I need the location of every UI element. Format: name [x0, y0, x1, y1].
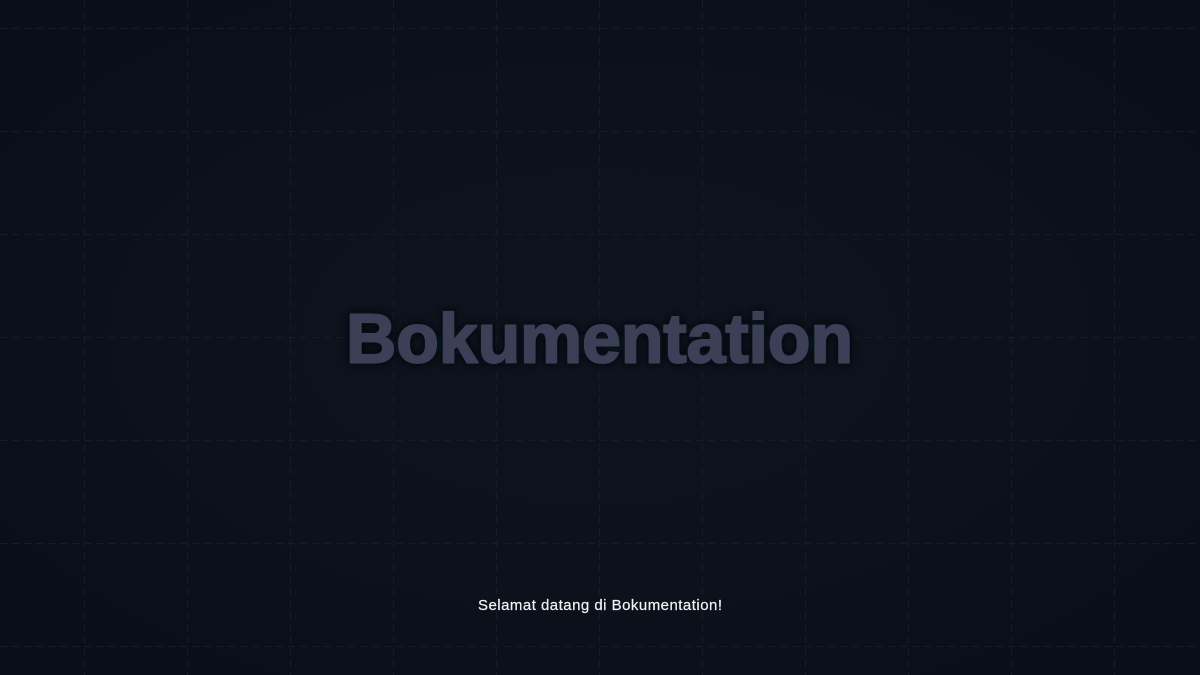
title: Bokumentation: [346, 300, 853, 378]
title: Bokumentation: [346, 300, 853, 378]
subtitle: Selamat datang di Bokumentation!: [478, 597, 722, 614]
